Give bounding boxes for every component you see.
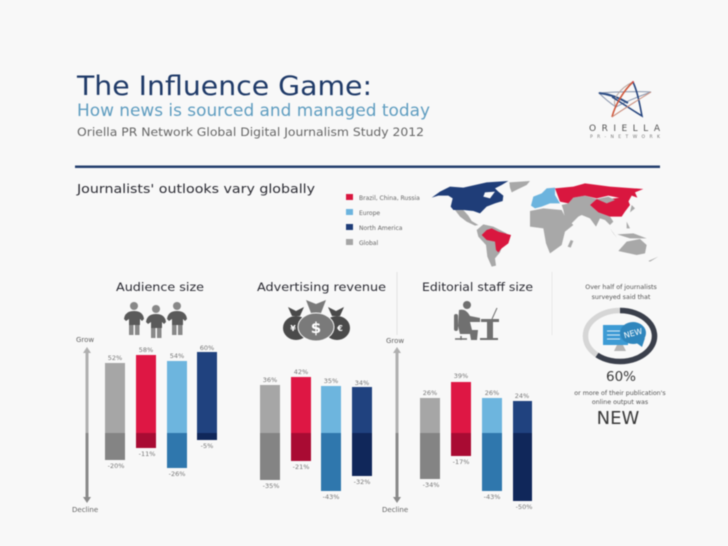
- bar chart: advertising revenue: 36%: [263, 376, 277, 384]
- axis arrow: audience: Grow: [76, 336, 94, 344]
- axis arrow: audience: Decline: [72, 506, 98, 514]
- heading: Audience size: Audience size: [116, 280, 204, 294]
- bar chart: editorial staff size: -50%: [516, 503, 532, 511]
- Europe: [531, 188, 560, 208]
- map legend: [346, 194, 420, 247]
- axis arrow: staff and advertising: [382, 272, 408, 514]
- bar chart: advertising revenue: -32%: [354, 478, 370, 486]
- bar chart: audience size: -20%: [108, 462, 124, 470]
- bar chart: audience size: -5%: [201, 442, 213, 450]
- Australia: [618, 239, 658, 262]
- bar chart: audience size: 52%: [108, 354, 122, 362]
- Southeast Asia: [610, 205, 647, 238]
- bar chart: editorial staff size: -34%: [423, 481, 439, 489]
- map legend: North America: [359, 225, 403, 232]
- China: [590, 198, 630, 217]
- Central America: [455, 210, 478, 226]
- header rule: [75, 166, 660, 168]
- bar chart: editorial staff size: 26%: [423, 389, 437, 397]
- study line: Oriella PR Network Global Digital Journalism Study 2012: [77, 125, 424, 139]
- callout supporting text: online output was: [592, 399, 648, 406]
- Russia: [555, 183, 643, 203]
- Brazil: [482, 228, 511, 252]
- bar chart: audience size: -26%: [169, 470, 185, 478]
- bar chart: advertising revenue: 34%: [355, 379, 369, 387]
- Madagascar: [568, 240, 573, 248]
- subtitle: How news is sourced and managed today: [77, 101, 430, 120]
- bar chart: editorial staff size: -17%: [453, 458, 469, 466]
- icon: three people: [124, 302, 187, 338]
- map legend: Brazil, China, Russia: [359, 195, 420, 202]
- icon: money bags: [283, 300, 350, 341]
- icon: monitor with NEW badge: [603, 322, 646, 351]
- Americas: [432, 181, 530, 267]
- logo wordmark: ORIELLA: [589, 124, 661, 134]
- Asia: [562, 196, 613, 227]
- bar chart: audience size: 54%: [170, 352, 184, 360]
- axis arrow: staff and advertising: Decline: [382, 506, 408, 514]
- bar chart: editorial staff size: [420, 372, 532, 511]
- map legend: Global: [359, 240, 378, 247]
- map legend: Europe: [359, 210, 380, 217]
- axis arrow: staff and advertising: Grow: [386, 337, 404, 345]
- icon: money bags: €: [336, 324, 343, 333]
- callout percentage: 60%: [606, 369, 636, 385]
- axis arrow: audience: [72, 336, 98, 514]
- callout intro text: Over half of journalists: [585, 284, 657, 291]
- bar chart: advertising revenue: 42%: [294, 368, 308, 376]
- Old World: [530, 183, 658, 262]
- icon: money bags: $: [311, 319, 321, 337]
- bar chart: editorial staff size: -43%: [484, 493, 500, 501]
- Africa: [530, 208, 573, 253]
- icon: monitor with NEW badge: NEW: [623, 327, 644, 340]
- icon: money bags: ¥: [290, 324, 296, 333]
- Greenland: [509, 181, 530, 192]
- section heading: Journalists' outlooks vary globally: [76, 182, 315, 196]
- bar chart: audience size: 60%: [200, 344, 214, 352]
- heading: Editorial staff size: Editorial staff size: [422, 280, 533, 294]
- South America: [477, 224, 507, 267]
- callout: online output: [552, 272, 666, 429]
- bar chart: advertising revenue: [260, 368, 372, 501]
- bar chart: advertising revenue: 35%: [324, 377, 338, 385]
- bar chart: editorial staff size: 39%: [454, 372, 468, 380]
- callout intro text: surveyed said that: [592, 294, 651, 301]
- bar chart: audience size: 58%: [139, 346, 153, 354]
- logo: Oriella PR Network: [589, 81, 661, 140]
- North America: [432, 181, 508, 213]
- bar chart: audience size: -11%: [139, 450, 155, 458]
- bar chart: editorial staff size: 24%: [515, 392, 529, 400]
- heading: Advertising revenue: Advertising revenue: [257, 280, 386, 294]
- Mongolia: [597, 197, 615, 203]
- bar chart: advertising revenue: -35%: [263, 482, 279, 490]
- bar chart: audience size: [105, 344, 217, 478]
- bar chart: advertising revenue: -21%: [293, 463, 309, 471]
- donut chart: 60%: [586, 310, 655, 362]
- callout supporting text: or more of their publication's: [574, 390, 666, 397]
- bar chart: advertising revenue: -43%: [323, 493, 339, 501]
- title: The Influence Game:: [76, 71, 372, 102]
- bar chart: editorial staff size: 26%: [485, 389, 499, 397]
- callout NEW word: NEW: [597, 408, 640, 429]
- logo tagline: PR-NETWORK: [590, 134, 661, 140]
- icon: person at desk: [454, 301, 499, 340]
- world map: [432, 181, 658, 267]
